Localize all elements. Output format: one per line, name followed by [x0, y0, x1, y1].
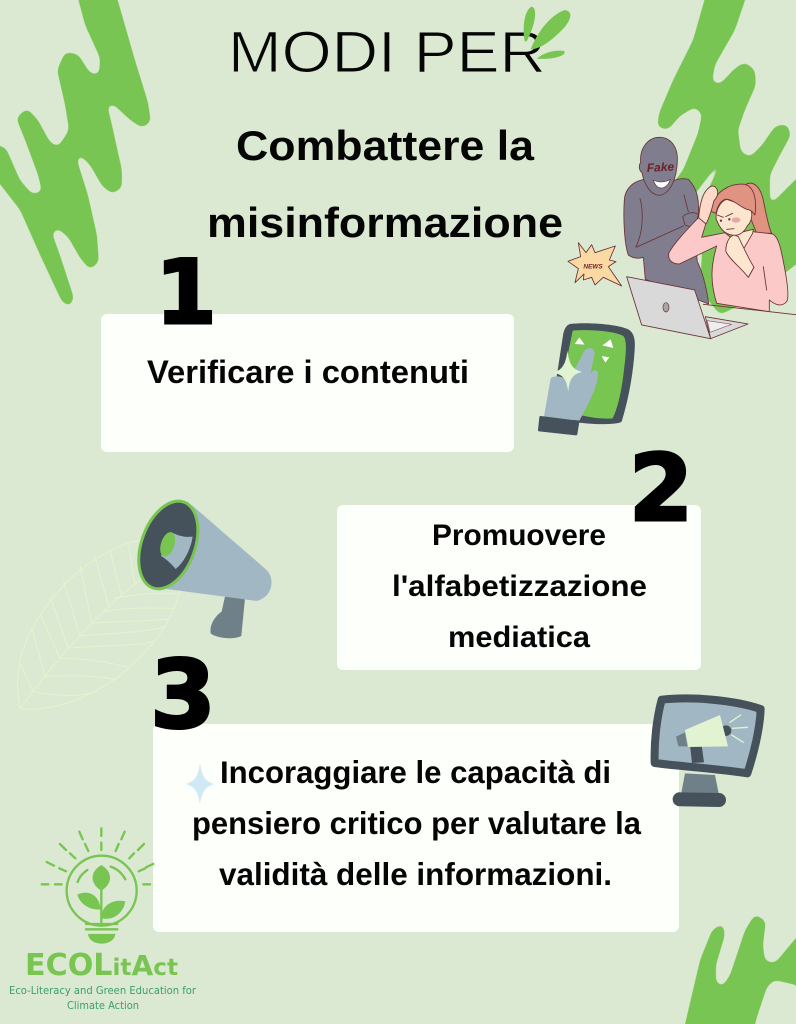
logo: ECOLitAct: Climate Action [67, 1000, 139, 1012]
bulb icon [42, 828, 153, 942]
card 3 text: pensiero critico per valutare la [192, 805, 641, 841]
news burst [568, 243, 622, 286]
NEWS label: NEWS [583, 263, 603, 270]
laptop screen [627, 277, 711, 339]
bell rim [128, 493, 209, 597]
woman hair [709, 184, 756, 215]
number 1: 1 [155, 241, 217, 344]
card 3 text: Incoraggiare le capacità di [220, 754, 611, 790]
card 3 text: validità delle informazioni. [219, 856, 612, 892]
woman sweater [669, 217, 788, 312]
icon: megaphone [128, 493, 272, 638]
woman hand at chin [726, 235, 754, 277]
decorative blob: top right [657, 0, 796, 315]
tagline: Eco-Literacy and Green Education for [9, 985, 197, 997]
sparkle [186, 763, 214, 804]
woman face [716, 199, 752, 235]
green cone [157, 530, 178, 558]
desk line [703, 304, 796, 315]
brand name: ECOLitAct [25, 948, 178, 983]
laptop logo [663, 303, 669, 312]
stand [681, 773, 719, 797]
card 2 text: mediatica [448, 621, 591, 654]
woman neck [732, 229, 753, 248]
Fake label: Fake [646, 160, 675, 175]
card 2 [337, 505, 701, 670]
decorative blob: bottom right [680, 914, 796, 1024]
screen megaphone rear [676, 732, 687, 746]
screen megaphone horn [685, 715, 728, 747]
man head [639, 137, 677, 195]
illustration: fake news man and worried woman [568, 137, 796, 339]
screen [655, 698, 761, 773]
woman hand at head [699, 186, 718, 224]
heading: Combattere la misinformazione: misinformazione [207, 199, 563, 246]
sweater cuff lines [748, 267, 767, 290]
card 2 text: l'alfabetizzazione [392, 570, 647, 603]
card 3 text [192, 754, 641, 892]
woman eyes and mouth [717, 213, 734, 229]
card 3 [153, 724, 679, 932]
bell inner [161, 532, 193, 569]
screen megaphone back [721, 725, 731, 736]
sleeve cuff [539, 417, 578, 434]
logo: ECOLitAct [9, 828, 197, 1012]
man body [624, 179, 709, 304]
card 2 text [392, 519, 647, 654]
card 1 text: Verificare i contenuti [147, 354, 469, 390]
card 1 [101, 314, 514, 452]
screen megaphone handle [690, 745, 704, 763]
woman ponytail [745, 183, 772, 233]
title: MODI PER: MODI PER [228, 20, 546, 85]
tablet arrows [575, 337, 585, 345]
horn [157, 505, 272, 601]
icon: monitor with megaphone [655, 698, 761, 807]
heading: Combattere la misinformazione: Combattere la [236, 122, 535, 169]
heading: Combattere la misinformazione [207, 122, 563, 246]
number 2: 2 [629, 435, 693, 542]
laptop base [705, 317, 748, 339]
decorative blob: top left [0, 0, 151, 307]
leaf outline [18, 540, 180, 709]
stand base [673, 792, 726, 807]
card 2 text: Promuovere [432, 519, 606, 552]
decorative leaves on title [524, 7, 570, 59]
man arm lines [636, 195, 699, 247]
sparkle [553, 351, 582, 392]
man smile [653, 179, 670, 188]
handle [210, 597, 245, 638]
number 3: 3 [150, 641, 216, 750]
hand [544, 348, 598, 421]
woman blush [732, 217, 740, 223]
sound lines [730, 715, 747, 742]
icon: tablet with hand [539, 323, 635, 434]
